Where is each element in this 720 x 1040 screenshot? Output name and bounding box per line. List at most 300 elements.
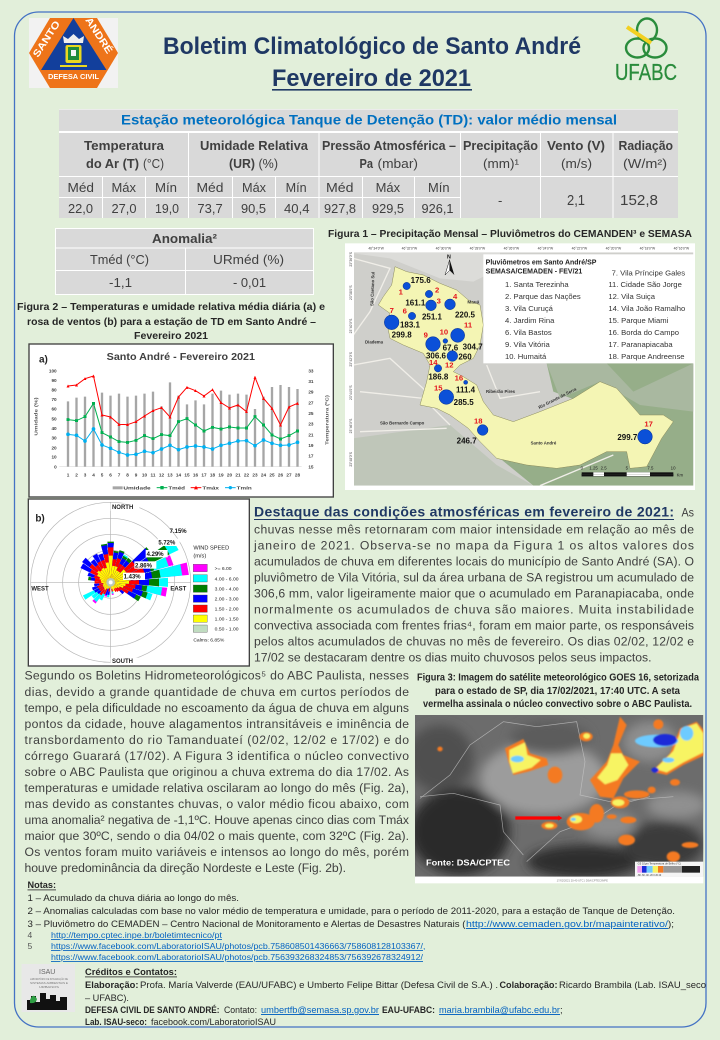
gauge numbers: 14 — [429, 358, 438, 367]
text block: boletins hidrometeorológicos: houve predominância da direção Nordeste e Leste (Fig. 2b). — [24, 861, 346, 875]
satellite temperature scale — [635, 862, 703, 877]
table headers: Vento (V) — [547, 138, 605, 153]
caption: figura 2: Figura 2 – Temperaturas e umidade relativa média diária (a) e — [17, 302, 325, 313]
panel letter a: a) — [39, 355, 48, 366]
place names: Mauá — [467, 299, 480, 304]
scale bar — [581, 465, 684, 477]
scale bar: 7.5 — [647, 465, 654, 470]
logo: UFABC — [615, 18, 677, 85]
percent rings labels: 2.86% — [135, 563, 153, 569]
map legend: 17. Paranapiacaba — [608, 340, 673, 349]
caption: figura 3: Figura 3: Imagem do satélite meteorológico GOES 16, setorizada — [417, 672, 699, 684]
x axis: days: 14 — [176, 473, 181, 478]
precipitation values: 175.6 — [411, 276, 431, 285]
place names — [365, 272, 578, 445]
credits and contacts: ; — [560, 1005, 563, 1016]
text block: destaque: 306,6 mm, valor ligeiramente maior que o acumulado em Paranapiacaba, onde — [254, 586, 694, 600]
coordinate ticks: 46°16'0"W — [674, 246, 690, 250]
map legend: SEMASA/CEMADEN - FEV/21 — [486, 269, 582, 276]
x axis: days: 23 — [252, 473, 258, 478]
x axis: days: 24 — [261, 473, 266, 478]
notes: 5 — [28, 941, 32, 951]
credits and contacts: umbertfb@semasa.sp.gov.br — [261, 1005, 379, 1016]
map legend: Pluviômetros em Santo André/SP — [486, 259, 597, 266]
precipitation values: 111.4 — [456, 385, 476, 394]
scale bar: 0 — [581, 465, 584, 470]
left axis: umidade: 30 — [51, 436, 57, 441]
map legend: 4. Jardim Rina — [505, 316, 555, 325]
percent rings labels — [123, 529, 187, 581]
yellow municipality area — [378, 267, 673, 468]
wind speed legend: WIND SPEED — [193, 545, 229, 551]
rain gauge bubbles — [384, 282, 652, 444]
panel letter b: b) — [35, 514, 45, 525]
text block: boletins hidrometeorológicos: transbordamento do rio Tamanduateí (02/02, 12/02 e 17/02) e do — [24, 733, 409, 747]
x axis: days — [67, 473, 300, 478]
wind speed legend: Calms: 6.85% — [193, 637, 225, 643]
wind speed legend: 3.00 - 4.00 — [215, 587, 239, 593]
compass labels: SOUTH — [112, 659, 133, 665]
scale bar: 5 — [626, 465, 629, 470]
map legend: 1. Santa Terezinha — [505, 280, 569, 289]
table: anomalia: -1,1 — [109, 275, 132, 290]
x axis: days: 28 — [295, 473, 300, 478]
map legend: 7. Vila Príncipe Gales — [612, 269, 685, 278]
text block: destaque: pluviômetro de Vila Vitória, sul da área urbana de SA registrou um acumulado de — [254, 571, 694, 585]
chart: temperature and humidity — [29, 344, 333, 497]
compass labels: EAST — [170, 586, 187, 592]
map legend: 11. Cidade São Jorge — [608, 280, 682, 289]
table values: - — [498, 193, 502, 208]
table headers: Pressão Atmosférica – — [322, 138, 456, 153]
left axis: umidade: 40 — [51, 426, 57, 431]
precipitation values: 220.5 — [455, 311, 476, 320]
x axis: days: 2 — [75, 473, 78, 478]
table headers: Radiação — [618, 138, 673, 153]
percent rings labels: 7.15% — [170, 529, 187, 535]
logo: ISAU: SISTEMAS AMBIENTAIS E — [30, 981, 68, 985]
right axis: temperatura: 23 — [308, 422, 314, 427]
chart legend — [113, 485, 252, 490]
x axis: days: 17 — [201, 473, 207, 478]
chart legend: Tméd — [168, 485, 185, 490]
coordinate ticks: 23°36'0"S — [349, 251, 353, 267]
table values: 926,1 — [422, 201, 454, 216]
map legend: 12. Vila Suiça — [608, 292, 656, 301]
coordinate ticks: 23°46'0"S — [349, 418, 353, 433]
logo: ISAU — [22, 964, 75, 1012]
compass labels: NORTH — [112, 505, 133, 511]
wind speed legend: (m/s) — [193, 553, 206, 559]
text block: boletins hidrometeorológicos: dias, devido a grande quantidade de chuva em curtos períodos de — [24, 685, 409, 699]
gauge numbers: 6 — [403, 307, 407, 316]
table: anomalia: URméd (%) — [213, 252, 284, 267]
x axis: days: 7 — [118, 473, 121, 478]
chart title: Santo André - Fevereiro 2021 — [107, 352, 256, 363]
wind speed legend: 0.50 - 1.00 — [215, 627, 239, 633]
credits and contacts: Colaboração: — [500, 980, 558, 991]
text block: boletins hidrometeorológicos: maior que 30ºC, sendo o dia 04/02 o mais quente, com 32ºC (Fig. 2a). — [24, 829, 409, 843]
precipitation values: 161.1 — [405, 298, 426, 307]
left axis: umidade: 20 — [51, 445, 57, 450]
text block: boletins hidrometeorológicos: pontos da cidade, houve alagamentos intransitáveis e iminência de — [24, 717, 409, 731]
caption: figura 2: Fevereiro 2021 — [134, 331, 208, 342]
table values: Mín — [428, 180, 450, 195]
precipitation values: 183.1 — [400, 321, 421, 330]
coordinate ticks: 46°22'0"W — [572, 246, 588, 250]
gauge numbers: 3 — [437, 296, 441, 305]
x axis: days: 12 — [159, 473, 164, 478]
x axis: days: 20 — [227, 473, 232, 478]
caption: figura 2: rosa de ventos (b) para a estação de TD em Santo André – — [27, 317, 316, 328]
map legend: 18. Parque Andreense — [608, 352, 685, 361]
text block: destaque: normalmente os acumulados de chuva são maiores. Muita instabilidade — [254, 603, 694, 617]
text block: boletins hidrometeorológicos: Segundo os Boletins Hidrometeorológicos⁵ do ABC Paulista, nesses — [24, 668, 409, 682]
wind speed legend: 2.00 - 3.00 — [215, 597, 239, 603]
scale bar: 2.5 — [601, 465, 607, 470]
satellite temperature scale: -80 -60 -40 -20 0 20 40 — [637, 875, 662, 877]
x axis: days: 22 — [244, 473, 249, 478]
precipitation values: 246.7 — [457, 436, 477, 445]
x axis: days: 1 — [67, 473, 70, 478]
text block: destaque — [253, 504, 694, 665]
notes: , — [423, 941, 425, 951]
text block: destaque: pelos altos acumulados de chuvas no mês de fevereiro. Os dias 02/02, 12/02 e — [254, 635, 694, 649]
table values: Méd — [68, 180, 94, 195]
credits and contacts: Elaboração: — [85, 980, 138, 991]
left axis: umidade: 80 — [51, 388, 57, 393]
text block: boletins hidrometeorológicos: sobre o ABC Paulista que originou a chuva extrema do dia 17/02. As — [24, 765, 409, 779]
table headers: (UR) — [229, 156, 255, 171]
table: anomalia: Anomalia² — [152, 231, 218, 246]
line: Tmín — [68, 429, 297, 455]
notes: 1 – Acumulado da chuva diária ao longo do mês. — [28, 893, 239, 904]
percent rings labels: 1.43% — [124, 575, 141, 581]
x axis: days: 10 — [142, 473, 147, 478]
table headers: (m/s) — [561, 156, 592, 171]
humidity bars — [68, 382, 297, 467]
gauge numbers: 12 — [445, 360, 454, 369]
table headers: (mm)¹ — [483, 156, 520, 171]
logo: ISAU: LABORATÓRIO DE INTEGRAÇÃO DE — [30, 976, 68, 981]
logo: UFABC: UFABC — [615, 59, 677, 85]
precipitation values: 299.7 — [617, 433, 638, 442]
table headers: Umidade Relativa — [200, 138, 309, 153]
gauge numbers: 7 — [390, 306, 394, 315]
left axis: umidade: 70 — [51, 397, 57, 402]
precipitation values: 304.7 — [463, 343, 483, 352]
table values: 27,0 — [112, 201, 136, 216]
x axis: days: 5 — [101, 473, 104, 478]
notes: https://www.facebook.com/LaboratorioISAU/photos/pcb.758608501436663/758608128103367/ — [51, 941, 424, 951]
map legend: 14. Vila João Ramalho — [608, 304, 685, 313]
credits and contacts: Contato: — [224, 1005, 257, 1016]
credits and contacts: Lab. ISAU-seco: — [85, 1017, 147, 1028]
logo: ISAU: URBANOS — [39, 985, 59, 989]
caption: figura 3 — [417, 672, 699, 710]
table values: 73,7 — [197, 201, 223, 216]
left axis: umidade: 10 — [51, 455, 57, 460]
chart: wind rose — [28, 499, 249, 666]
scale bar: Km — [677, 472, 684, 477]
caption: figura 2 — [17, 302, 325, 342]
table: anomalia: Tméd (°C) — [90, 252, 149, 267]
x axis: days: 9 — [135, 473, 138, 478]
precipitation values: 306.6 — [426, 352, 447, 361]
table: anomalia — [55, 228, 314, 295]
right axis: temperatura: 29 — [308, 390, 314, 395]
scale bar: 10 — [671, 465, 676, 470]
notes: 2 – Anomalias calculadas com base no valor médio de temperatura e umidade, para o período de 2011-2020, para a estação de Tanque de Detenção. — [28, 906, 675, 917]
text block: boletins hidrometeorológicos: temperaturas e umidade relativa oscilaram ao longo do mês (Fig. 2a), — [24, 781, 409, 795]
table headers: Temperatura — [84, 138, 165, 153]
precipitation values: 299.8 — [392, 331, 412, 340]
x axis: days: 26 — [278, 473, 283, 478]
title: Boletim Climatológico de Santo André — [163, 33, 581, 60]
coordinate ticks: 23°40'0"S — [349, 318, 353, 333]
red arrow — [515, 815, 562, 821]
table values: Máx — [112, 180, 136, 195]
coordinate ticks: 23°38'0"S — [349, 285, 353, 300]
table headers: (W/m²) — [623, 156, 667, 171]
text block: boletins hidrometeorológicos: uma anomalia² negativa de -1,1ºC. Houve apenas cinco dias com Tmáx — [24, 813, 409, 827]
table headers: (%) — [258, 156, 278, 171]
right axis: temperatura: 33 — [308, 368, 314, 373]
caption: figura 1: Figura 1 – Precipitação Mensal – Pluviômetros do CEMANDEN³ e SEMASA — [328, 229, 692, 240]
precipitation values: 251.1 — [422, 313, 443, 322]
table values: Máx — [376, 180, 401, 195]
x axis: days: 21 — [235, 473, 241, 478]
compass labels: WEST — [31, 586, 49, 592]
coordinate ticks — [349, 246, 690, 467]
table values: 19,0 — [155, 201, 179, 216]
text block: boletins hidrometeorológicos: tempo, e pela dificuldade no escoamento da água de chuva em alguns — [24, 701, 409, 715]
x axis: days: 13 — [167, 473, 173, 478]
coordinate ticks: 23°42'0"S — [349, 351, 353, 367]
table values: Mín — [155, 180, 177, 195]
notes: 3 – Pluviômetro do CEMADEN – Centro Nacional de Monitoramento e Alertas de Desastres Naturais ( — [28, 919, 466, 930]
coordinate ticks: 46°30'0"W — [436, 246, 452, 250]
place names: São Bernardo Campo — [380, 420, 425, 425]
table values — [68, 180, 658, 216]
text block: boletins hidrometeorológicos: mas devido as constantes chuvas, o valor médio ficou abaixo, com — [24, 797, 409, 811]
table values: 927,8 — [324, 201, 356, 216]
place names: São Caetano Sul — [369, 272, 376, 306]
precipitation values — [392, 276, 638, 445]
coordinate ticks: 23°44'0"S — [349, 385, 353, 400]
x axis: days: 18 — [210, 473, 215, 478]
notes heading: Notas: — [28, 880, 56, 891]
table headers: (°C) — [143, 156, 164, 171]
gauge numbers: 4 — [453, 292, 458, 301]
notes: http://tempo.cptec.inpe.br/boletimtecnico/pt — [51, 930, 223, 940]
line: Tméd — [68, 403, 297, 442]
notes: http://www.cemaden.gov.br/mapainterativo/ — [466, 919, 668, 930]
notes — [28, 880, 675, 962]
text block: destaque: 17/02 se destacaram dentre os dias muito chuvosos pelos seus impactos. — [254, 651, 652, 665]
gauge numbers: 2 — [435, 286, 439, 295]
coordinate ticks: 46°24'0"W — [538, 246, 554, 250]
map legend: 6. Vila Bastos — [505, 328, 552, 337]
table: anomalia: - 0,01 — [233, 275, 266, 290]
credits heading: Créditos e Contatos: — [85, 967, 177, 978]
satellite image — [407, 715, 707, 883]
x axis: days: 19 — [218, 473, 224, 478]
text block: destaque: acumulados de chuva em diferentes locais do município de Santo André (SA). O — [254, 555, 694, 569]
credits and contacts: – UFABC). — [85, 993, 129, 1004]
table headers: Pa — [360, 156, 374, 171]
precipitation values: 285.5 — [454, 398, 474, 407]
notes: ); — [668, 919, 674, 930]
credits and contacts: facebook.com/LaboratorioISAU — [151, 1017, 276, 1028]
x axis: days: 6 — [109, 473, 112, 478]
precipitation values: 260 — [458, 353, 472, 362]
gauge numbers: 15 — [434, 384, 443, 393]
left axis: umidade: 50 — [51, 416, 57, 421]
logo: Defesa Civil Santo André: DEFESA CIVIL — [48, 72, 99, 81]
percent rings labels: 4.29% — [147, 552, 164, 558]
x axis: days: 8 — [126, 473, 129, 478]
table values: 152,8 — [620, 193, 658, 209]
gauge numbers: 17 — [644, 419, 653, 428]
place names: Diadema — [365, 340, 384, 345]
north arrow — [445, 254, 454, 275]
left axis: umidade: 100 — [49, 368, 57, 373]
coordinate ticks: 46°28'0"W — [470, 246, 486, 250]
map legend: 15. Parque Miami — [608, 316, 669, 325]
chart legend: Umidade — [123, 485, 151, 490]
axis title: temperatura: Temperatura (ºC) — [325, 394, 330, 445]
table values: Máx — [242, 180, 266, 195]
map legend: 16. Borda do Campo — [608, 328, 679, 337]
coordinate ticks: 23°48'0"S — [349, 451, 353, 467]
coordinate ticks: 46°32'0"W — [402, 246, 418, 250]
table values: Méd — [196, 180, 224, 195]
line: Tmáx — [68, 376, 297, 425]
right axis: temperatura: 31 — [308, 379, 314, 384]
right axis: temperatura: 17 — [308, 454, 314, 459]
table values: 40,4 — [284, 201, 310, 216]
gauge numbers: 16 — [455, 373, 463, 382]
x axis: days: 16 — [193, 473, 198, 478]
place names: Rio Grande da Serra — [538, 386, 578, 410]
table values: 2,1 — [567, 193, 585, 209]
gauge numbers — [390, 286, 653, 428]
precipitation values: 67.6 — [443, 344, 459, 353]
title: Fevereiro de 2021 — [272, 65, 471, 92]
percent rings labels: 5.72% — [158, 541, 176, 547]
text block: destaque: As — [682, 506, 694, 520]
table values: 929,5 — [372, 201, 404, 216]
heading: destaque: Destaque das condições atmosféricas em fevereiro de 2021: — [254, 504, 674, 520]
x axis: days: 15 — [184, 473, 190, 478]
map legend: 10. Humaitá — [505, 352, 547, 361]
table values: 90,5 — [241, 201, 266, 216]
credits and contacts: Ricardo Brambila (Lab. ISAU_seco — [559, 980, 706, 991]
axis title: umidade: Umidade (%) — [34, 397, 39, 436]
table values: Méd — [326, 180, 354, 195]
table values: Mín — [286, 180, 307, 195]
logo: Defesa Civil Santo André — [29, 15, 118, 88]
text block: boletins hidrometeorológicos: Os ventos foram muito variáveis e intensos ao longo do mês, porém — [24, 845, 409, 859]
table headers — [84, 138, 673, 171]
gauge numbers: 18 — [474, 416, 483, 425]
right axis: temperatura: 19 — [308, 443, 314, 448]
table title: Estação meteorológica Tanque de Detenção (TD): valor médio mensal — [121, 112, 617, 128]
table headers: (mbar) — [378, 156, 418, 171]
left axis: umidade: 90 — [51, 378, 57, 383]
wind speed legend: 1.50 - 2.00 — [215, 607, 239, 613]
text block: destaque: convectiva associada com frentes frias⁴, foram em maior parte, os responsáveis — [254, 619, 694, 633]
gauge numbers: 10 — [440, 328, 448, 337]
text block: boletins hidrometeorológicos: córrego Guarará (17/02). A Figura 3 identifica o núcleo convectivo — [24, 749, 409, 763]
credits and contacts: Profa. María Valverde (EAU/UFABC) e Umberto Felipe Bittar (Defesa Civil de S.A.) . — [140, 980, 498, 991]
table values: 22,0 — [68, 201, 93, 216]
coordinate ticks: 46°34'0"W — [368, 246, 385, 250]
map legend: 3. Vila Curuçá — [505, 304, 554, 313]
x axis: days: 27 — [286, 473, 292, 478]
precipitation values: 186.8 — [428, 373, 449, 382]
chart legend: Tmín — [237, 485, 252, 490]
table headers: Precipitação — [463, 138, 538, 153]
x axis: days: 11 — [151, 473, 156, 478]
x axis: days: 4 — [92, 473, 95, 478]
left axis: umidade: 60 — [51, 407, 57, 412]
wind speed legend: 4.00 - 6.00 — [215, 576, 239, 582]
scale bar: 1.25 — [589, 465, 598, 470]
map legend — [483, 254, 695, 363]
chart legend: Tmáx — [202, 485, 220, 490]
credits and contacts: DEFESA CIVIL DE SANTO ANDRÉ: — [85, 1005, 220, 1016]
right axis: temperatura: 21 — [308, 432, 314, 437]
text block: destaque: chuvas nesse mês retornaram com maior intensidade em relação ao mês de — [254, 523, 694, 537]
notes: https://www.facebook.com/LaboratorioISAU/photos/pcb.756393268324853/756392678324912/ — [51, 952, 424, 962]
source label: Fonte: DSA/CPTEC — [426, 858, 511, 868]
coordinate ticks: 46°20'0"W — [606, 246, 622, 250]
place names: Ribeirão Pires — [486, 389, 516, 394]
logo: Defesa Civil Santo André: ANDRÉ — [82, 15, 116, 56]
table headers: do Ar (T) — [86, 156, 139, 171]
wind speed legend: 1.00 - 1.50 — [215, 617, 239, 623]
logo: Defesa Civil Santo André: SANTO — [31, 19, 63, 60]
north arrow: N — [447, 254, 451, 260]
compass labels — [31, 503, 187, 665]
right axis: temperatura: 15 — [308, 464, 314, 469]
satellite image: 17/02/2021 20:40 UTC | DSA/CPTEC/INPE — [557, 879, 608, 883]
map legend: 9. Vila Vitória — [505, 340, 551, 349]
table: estação meteorológica — [59, 109, 678, 218]
logo: ISAU: ISAU — [39, 969, 55, 976]
gauge numbers: 1 — [399, 288, 404, 297]
text block: destaque: janeiro de 2021. Observa-se no mapa da Figura 1 os altos valores dos — [253, 539, 694, 553]
map: precipitação mensal — [345, 243, 695, 490]
satellite temperature scale: G5 10μm Temperatura de Brilho (°C) — [638, 862, 681, 866]
wind speed legend: >= 6.00 — [215, 566, 232, 572]
right axis: temperatura: 25 — [308, 411, 314, 416]
x axis: days: 25 — [269, 473, 275, 478]
coordinate ticks: 46°26'0"W — [504, 246, 520, 250]
place names: Santo André — [531, 440, 557, 445]
caption: figura 3: para o estado de SP, dia 17/02/2021, 17:40 UTC. A seta — [435, 686, 680, 697]
right axis: temperatura: 27 — [308, 400, 314, 405]
text block: boletins hidrometeorológicos — [24, 668, 409, 875]
title — [163, 33, 581, 92]
credits and contacts — [85, 967, 706, 1028]
caption: figura 3: vermelha assinala o núcleo convectivo sobre o ABC Paulista. — [423, 699, 692, 710]
wind speed legend — [193, 545, 239, 643]
x axis: days: 3 — [84, 473, 87, 478]
notes: 4 — [28, 930, 32, 940]
